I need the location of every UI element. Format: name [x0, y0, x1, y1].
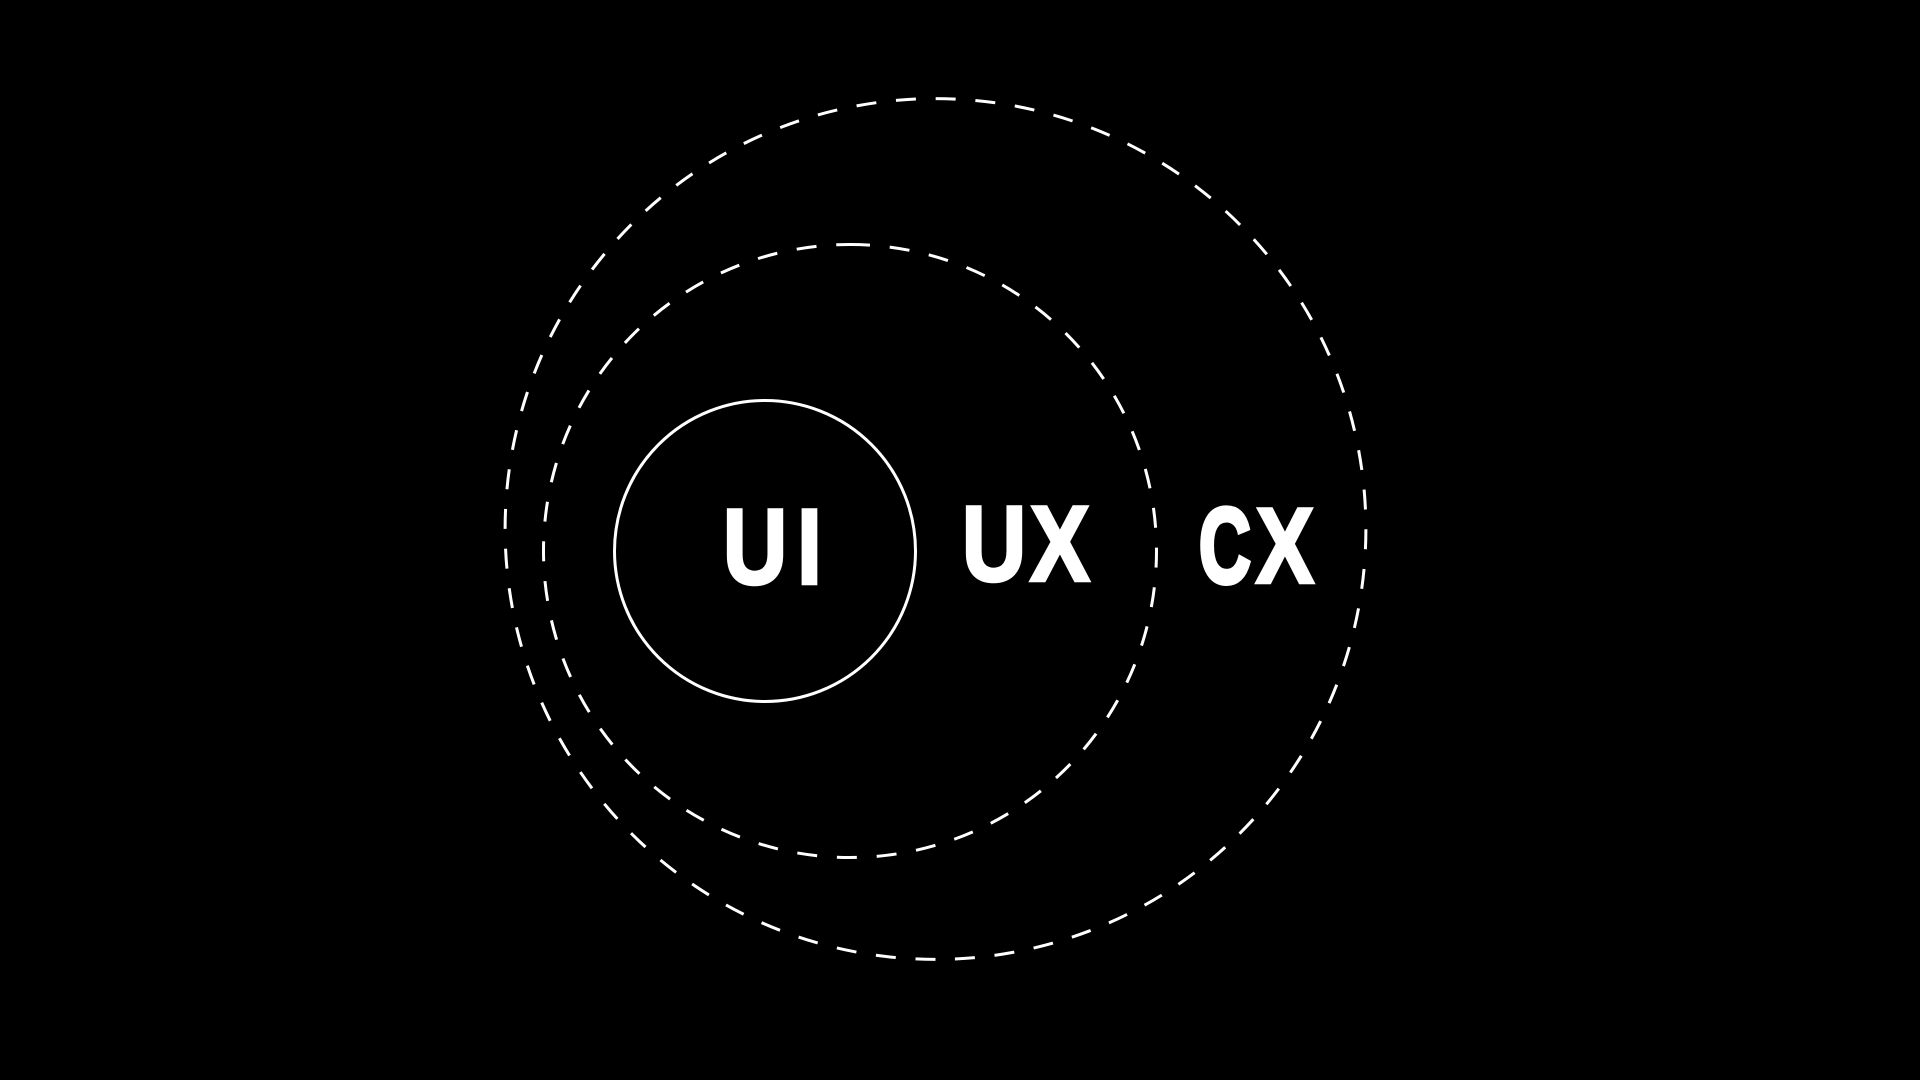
label: UX: UX	[962, 484, 1090, 603]
label: CX	[1199, 486, 1314, 606]
label: CX: C	[1199, 487, 1251, 606]
circle: inner UI solid boundary	[614, 400, 916, 702]
circle: middle UX dashed boundary	[544, 244, 1156, 858]
circle: outer CX dashed boundary	[505, 99, 1366, 959]
label: UI: UI	[723, 487, 822, 606]
label: CX: X	[1256, 486, 1314, 606]
